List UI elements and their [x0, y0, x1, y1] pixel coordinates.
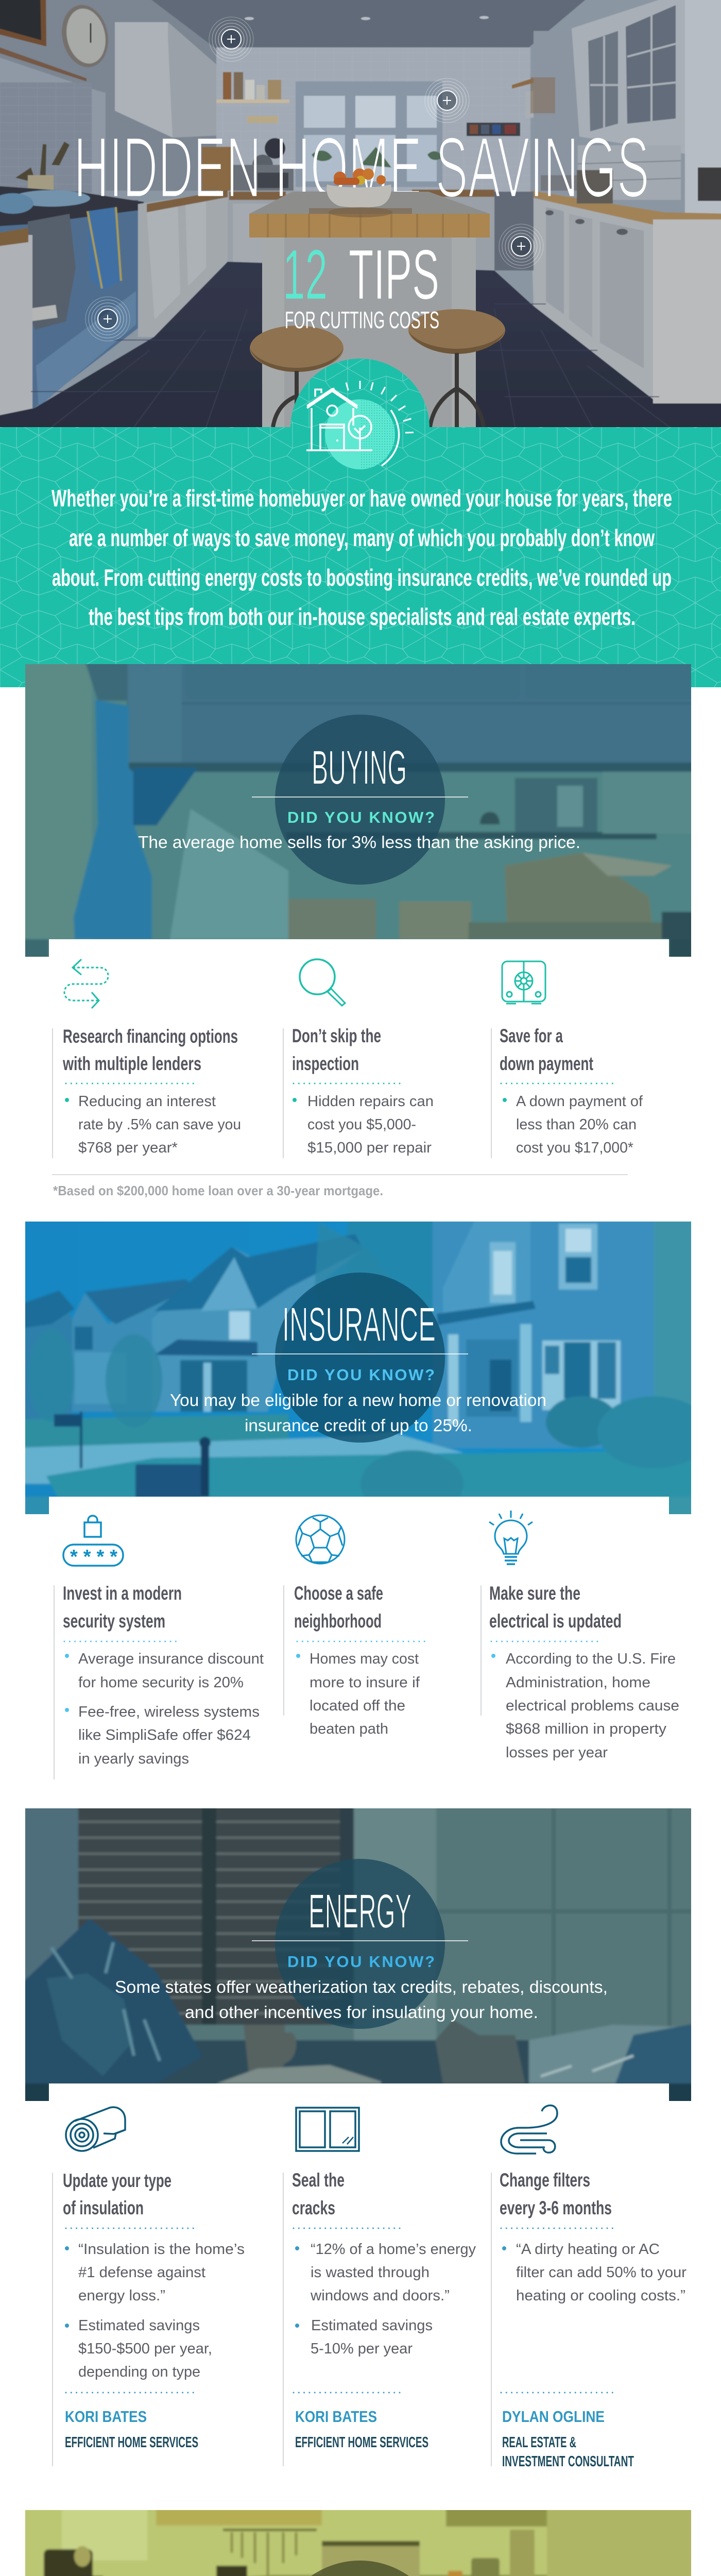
column: change filters: REAL ESTATE & — [502, 2434, 576, 2451]
column: safe neighborhood: more to insure if — [310, 1674, 420, 1691]
footnote: *Based on $200,000 home loan over a 30-year mortgage. — [53, 1183, 383, 1198]
column: safe neighborhood: located off the — [310, 1698, 405, 1714]
column: electrical: According to the U.S. Fire — [506, 1651, 676, 1667]
column: seal cracks: KORI BATES — [295, 2408, 377, 2426]
column: inspection: Don’t skip the — [292, 1025, 381, 1046]
column: seal cracks: Seal the — [292, 2170, 345, 2191]
column: insulation: EFFICIENT HOME SERVICES — [65, 2434, 198, 2451]
column: electrical: electrical is updated — [489, 1611, 622, 1632]
hotspot markers — [1, 0, 543, 341]
fact: insurance credit of up to 25%. — [245, 1416, 472, 1435]
column: change filters: heating or cooling costs.” — [516, 2287, 685, 2304]
column: modern security: Invest in a modern — [63, 1583, 182, 1604]
column: insulation: of insulation — [63, 2197, 144, 2218]
hotspot 1 — [209, 17, 253, 61]
hotspot 2 — [425, 78, 469, 123]
column: modern security: security system — [63, 1611, 165, 1632]
column: modern security: for home security is 20% — [78, 1674, 244, 1691]
panel: energy photo — [15, 1798, 701, 2111]
column: down payment: down payment — [500, 1053, 593, 1074]
section header: buying — [138, 715, 580, 885]
column: safe neighborhood: Homes may cost — [310, 1651, 419, 1667]
column: modern security — [54, 1583, 264, 1780]
panel: insurance photo — [25, 1222, 691, 1514]
fact: You may be eligible for a new home or renovation — [170, 1391, 546, 1410]
column: seal cracks: EFFICIENT HOME SERVICES — [295, 2434, 428, 2451]
column: modern security: like SimpliSafe offer $624 — [78, 1727, 251, 1743]
icon: safe — [502, 961, 545, 1004]
column: modern security: Average insurance discount — [78, 1651, 264, 1667]
fact: and other incentives for insulating your home. — [185, 2003, 538, 2022]
column: change filters: filter can add 50% to your — [516, 2264, 686, 2281]
column: research financing: with multiple lenders — [62, 1053, 201, 1074]
kitchen island with bowl and stools — [249, 168, 505, 427]
column: change filters — [491, 2170, 686, 2470]
column: change filters: INVESTMENT CONSULTANT — [502, 2453, 634, 2470]
column: research financing — [53, 1026, 241, 1158]
column: seal cracks — [283, 2170, 476, 2466]
icon: dotted arrows — [64, 959, 108, 1008]
hero kitchen photo — [0, 0, 721, 437]
column: insulation: #1 defense against — [78, 2264, 205, 2281]
column: insulation: energy loss.” — [78, 2287, 165, 2304]
column: change filters: DYLAN OGLINE — [502, 2408, 605, 2426]
panel: buying photo — [15, 654, 701, 967]
white card: energy — [49, 2083, 669, 2114]
column: insulation: Estimated savings — [78, 2317, 200, 2334]
column: down payment — [491, 1025, 643, 1158]
white card: insurance — [49, 1497, 669, 1528]
column: down payment: cost you $17,000* — [516, 1140, 633, 1156]
column: electrical: Make sure the — [489, 1583, 580, 1604]
subtitle: 12 tips: FOR CUTTING COSTS — [285, 307, 439, 333]
icon: insulation roll — [66, 2107, 125, 2151]
fact — [170, 1391, 546, 1435]
column: insulation: KORI BATES — [65, 2408, 147, 2426]
column: research financing: rate by .5% can save you — [78, 1116, 241, 1133]
subtitle: 12 tips — [283, 235, 439, 333]
column: seal cracks: “12% of a home’s energy — [311, 2241, 476, 2258]
heading: energy: ENERGY — [308, 1885, 411, 1938]
column: insulation: Update your type — [63, 2170, 171, 2191]
column: inspection — [283, 1025, 434, 1158]
column: safe neighborhood: neighborhood — [294, 1611, 382, 1632]
column: inspection: cost you $5,000- — [307, 1116, 416, 1133]
column: modern security: Fee-free, wireless systems — [78, 1704, 260, 1720]
intro paragraph — [52, 485, 672, 630]
column: down payment: less than 20% can — [516, 1116, 637, 1133]
column: safe neighborhood: beaten path — [310, 1721, 388, 1737]
subtitle: 12 tips: 12 — [283, 235, 328, 314]
icon: magnifier — [300, 959, 345, 1006]
column: down payment: Save for a — [500, 1025, 563, 1046]
icon: wind — [501, 2105, 557, 2154]
column: seal cracks: is wasted through — [311, 2264, 430, 2281]
column: insulation: “Insulation is the home’s — [78, 2241, 245, 2258]
heading: insurance: INSURANCE — [282, 1297, 436, 1351]
panel: appliances photo — [25, 2510, 691, 2576]
column: research financing: $768 per year* — [78, 1140, 178, 1156]
column: insulation — [53, 2170, 245, 2466]
column: electrical — [481, 1583, 679, 1761]
column: change filters: every 3-6 months — [500, 2197, 612, 2218]
column: research financing: Research financing options — [63, 1026, 238, 1047]
heading: buying: BUYING — [312, 741, 407, 794]
column: electrical: electrical problems cause — [506, 1698, 679, 1714]
fact: The average home sells for 3% less than the asking price. — [138, 833, 580, 852]
column: modern security: in yearly savings — [78, 1751, 189, 1767]
fact — [115, 1977, 608, 2022]
fact: Some states offer weatherization tax credits, rebates, discounts, — [115, 1977, 608, 1996]
column: inspection: inspection — [292, 1053, 359, 1074]
hotspot 4 — [1, 0, 130, 341]
column: safe neighborhood — [284, 1583, 425, 1737]
did you know: DID YOU KNOW? — [287, 808, 435, 826]
icon: soccer ball — [296, 1515, 345, 1564]
column: research financing: Reducing an interest — [78, 1093, 216, 1110]
column: safe neighborhood: Choose a safe — [294, 1583, 383, 1604]
column: seal cracks: Estimated savings — [311, 2317, 433, 2334]
column: seal cracks: cracks — [292, 2197, 335, 2218]
hotspot 3 — [499, 224, 543, 268]
did you know: DID YOU KNOW? — [287, 1366, 435, 1384]
icon: light bulb — [489, 1511, 533, 1564]
column: change filters: “A dirty heating or AC — [516, 2241, 660, 2258]
icon: window — [296, 2108, 359, 2151]
column: seal cracks: windows and doors.” — [310, 2287, 450, 2304]
column: down payment: A down payment of — [516, 1093, 643, 1110]
white card: buying — [49, 939, 669, 970]
subtitle: 12 tips: TIPS — [349, 235, 439, 314]
column: change filters: Change filters — [500, 2170, 590, 2191]
column: insulation: depending on type — [78, 2364, 200, 2380]
teal intro band — [0, 359, 721, 687]
column: inspection: Hidden repairs can — [307, 1093, 434, 1110]
column: electrical: Administration, home — [506, 1674, 650, 1691]
column: electrical: losses per year — [506, 1744, 608, 1761]
column: insulation: $150-$500 per year, — [78, 2341, 212, 2357]
column: inspection: $15,000 per repair — [307, 1140, 432, 1156]
column: seal cracks: 5-10% per year — [311, 2341, 413, 2357]
column: electrical: $868 million in property — [506, 1721, 667, 1737]
section header: appliances — [211, 2561, 511, 2576]
section header: energy — [115, 1859, 608, 2029]
section header: insurance — [170, 1273, 546, 1443]
icon: house with tree and sun — [306, 381, 414, 469]
did you know: DID YOU KNOW? — [287, 1953, 435, 1971]
icon: lock and password — [63, 1516, 123, 1568]
icon: lock and password: **** — [70, 1546, 117, 1568]
